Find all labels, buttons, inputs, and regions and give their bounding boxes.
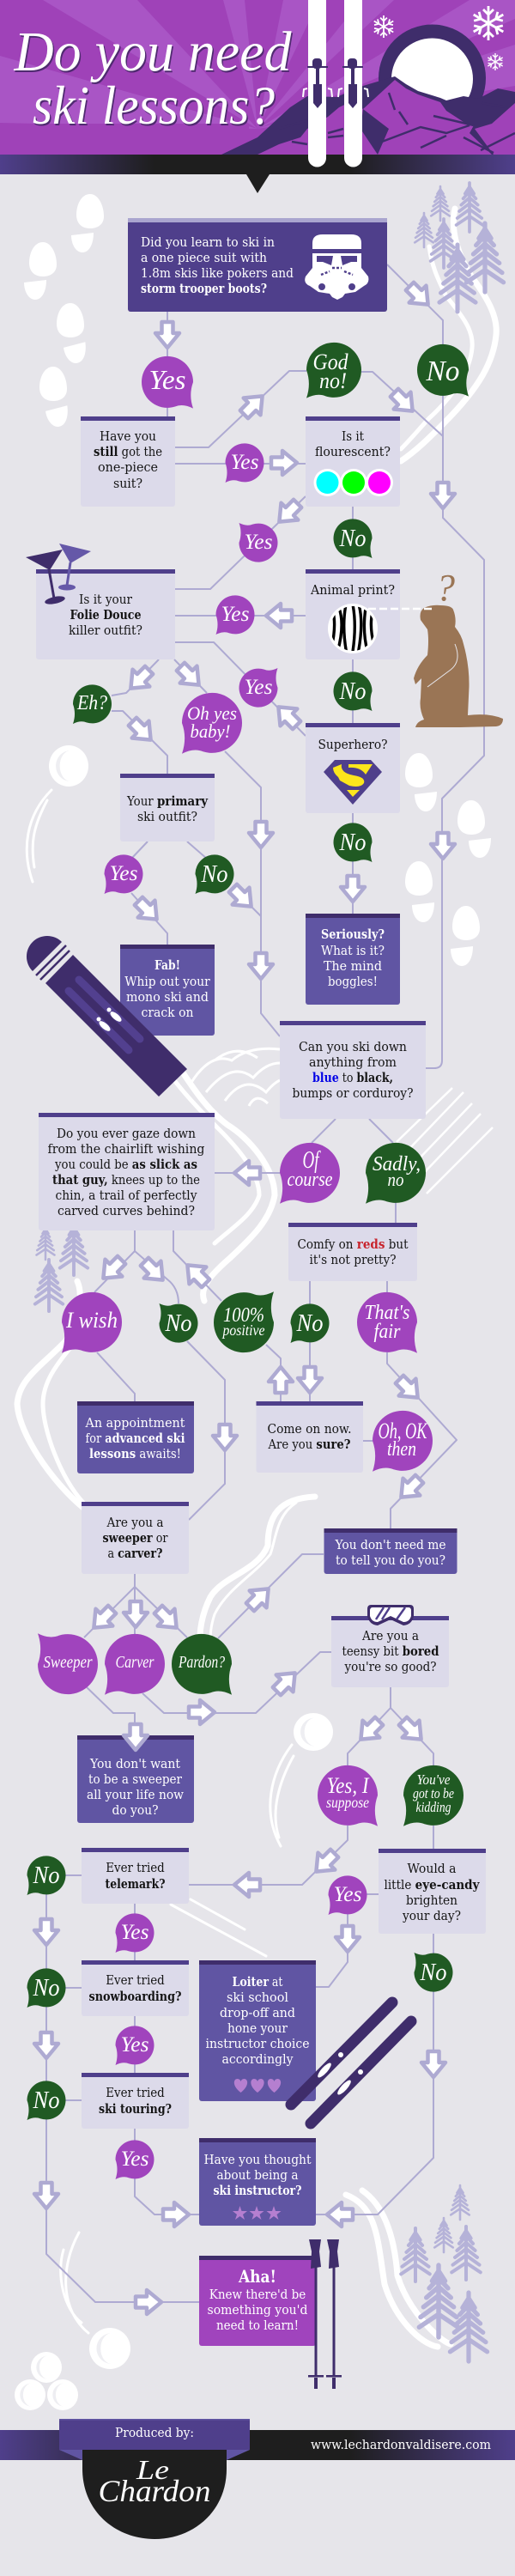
panel: you don't need me: You don't need me [335,1539,446,1552]
bubble: Sadly, no [366,1143,426,1204]
snowballs [15,745,333,2410]
panel: you don't want to be a sweeper: all your life now [87,1789,185,1802]
panel: slick as that guy: chin, a trail of perfectly [55,1189,197,1203]
panel: seriously: The mind [324,960,382,974]
panel: blue to black: Can you ski down [299,1041,407,1054]
trees [35,183,504,2361]
panel: storm trooper boots [128,218,387,312]
icon: storm trooper helmet [305,234,368,300]
bubble: Of course: course [287,1169,333,1191]
bubble: Of course: Of [302,1147,321,1174]
bubble: Yes: Yes [244,531,273,554]
bubble: No: No [420,1959,446,1986]
illustration: mono ski [27,936,187,1097]
produced by ribbon: Produced by: [115,2427,194,2440]
bubble: No: No [296,1310,323,1337]
bubble: That's fair: fair [374,1321,401,1343]
panel: primary outfit: ski outfit? [137,811,197,824]
panel: ski touring [82,2073,189,2129]
bubble: Yes, I suppose: suppose [326,1794,369,1811]
panel: you don't want to be a sweeper [77,1735,194,1823]
bubble: I wish: I wish [65,1308,118,1333]
bubble: No: No [339,829,366,856]
panel: folie douce: Is it your [79,593,132,607]
bubble: Yes: Yes [221,603,249,626]
produced by ribbon [59,2419,250,2450]
panel: slick as that guy: that guy, knees up to the [52,1173,200,1188]
panel: teensy bit bored: teensy bit bored [342,1644,439,1659]
panel: storm trooper boots: a one piece suit with [141,252,267,265]
panel: folie douce: Folie Douce [70,608,141,623]
bubble: Oh yes baby!: baby! [191,720,230,742]
title: ski lessons? [34,76,276,137]
bar [0,155,515,174]
connector lines [46,264,484,2302]
panel: still got the suit: suit? [113,477,142,491]
panel: seriously [306,914,400,1005]
panel: primary outfit: Your primary [126,794,209,809]
bubble: Sweeper [38,1633,98,1694]
bubble: You've got to be kidding: You've [417,1771,451,1788]
panel: blue to black [280,1021,426,1119]
icon: super shield [324,760,382,805]
panel: snowboarding: Ever tried [106,1974,165,1988]
panel: still got the suit: still got the [94,445,162,459]
icon: stars [233,2206,282,2220]
panel: loiter: Loiter at [232,1975,283,1990]
logo badge [59,2450,250,2539]
snowflakes [373,6,506,70]
bubble: Oh yes baby! [182,693,242,754]
panel: flourescent: Is it [342,430,364,444]
bubble: 100% positive: 100% [223,1304,264,1327]
panel: sweeper or carver: a carver? [108,1546,163,1561]
bubble: Oh, OK then: Oh, OK [378,1419,428,1443]
icon: zebra print [328,604,378,657]
panel: aha: something you'd [208,2304,307,2318]
bubble: Yes [328,1875,367,1915]
panel: fab: Fab! [154,958,180,973]
panel: eye candy [379,1849,486,1934]
bubble: Yes [142,356,193,409]
illustration: crossed skis [291,2002,411,2123]
panel: loiter: instructor choice [206,2038,309,2051]
bubble: Yes: Yes [244,676,273,699]
panel: telemark: telemark? [105,1877,165,1892]
panel: aha: need to learn! [216,2319,299,2333]
bubble: No [334,519,373,558]
panel: loiter: hone your [227,2022,288,2036]
bubble: No [414,1953,452,1992]
bubble: No [27,1968,65,2008]
panel: eye candy: your day? [402,1910,461,1923]
panel: slick as that guy [39,1113,215,1230]
panel: ski instructor [199,2138,316,2226]
panel: superhero [306,723,400,813]
bubble: Eh? [73,684,112,724]
icon: goggles [367,1605,414,1625]
title: Do you need [14,21,292,83]
panel: come on now [256,1401,363,1473]
bubble: That's fair: That's [364,1302,410,1324]
panel: slick as that guy: carved curves behind? [58,1205,195,1218]
ski tracks [17,209,496,2347]
panel: ski touring: ski touring? [99,2102,172,2117]
panel: fab: crack on [141,1006,194,1020]
panel: comfy on reds [288,1223,417,1281]
bubble: Oh, OK then: then [387,1438,416,1461]
bubble: Eh?: Eh? [76,692,107,714]
panel: come on now: Are you sure? [268,1437,350,1452]
bubble: Of course [280,1143,340,1204]
panel: you don't need me [324,1528,457,1574]
bubble: Sadly, no: no [388,1169,403,1190]
panel: advanced ski lessons: for advanced ski [86,1431,185,1446]
panel: blue to black: anything from [309,1056,397,1070]
panel: fab: Whip out your [124,975,210,989]
bubble: Yes: Yes [149,364,185,395]
bubble: Yes [239,668,278,708]
panel: fab: mono ski and [126,991,209,1005]
panel: advanced ski lessons: An appointment [85,1417,185,1431]
icon: glasses line [368,608,433,610]
panel: aha [199,2256,316,2346]
panel: teensy bit bored: you're so good? [344,1661,437,1674]
panel: advanced ski lessons: lessons awaits! [89,1447,181,1461]
bubble: Yes: Yes [333,1883,362,1906]
panel: sweeper or carver [82,1502,189,1574]
panel: teensy bit bored: Are you a [361,1630,419,1643]
panel: animal print: Animal print? [310,584,395,598]
bubble: No [27,1856,65,1895]
panel: animal print [306,569,400,659]
footer url: www.lechardonvaldisere.com [311,2439,491,2452]
bubble: Carver: Carver [115,1653,154,1672]
title [14,21,294,137]
panel: loiter [199,1960,316,2101]
bubble: God no!: no! [319,368,347,393]
bubble: No: No [339,526,366,552]
panel: still got the suit: one-piece [98,461,158,475]
bubble: Pardon? [172,1634,232,1695]
panel: you don't want to be a sweeper: do you? [112,1804,159,1818]
bubble: Yes: Yes [120,1921,149,1944]
bubble: No: No [339,678,366,705]
icon: cocktail glasses [26,544,91,605]
panel: storm trooper boots: Did you learn to ski in [141,236,275,250]
panel: you don't need me: to tell you do you? [336,1554,445,1568]
bubble: No [195,854,233,894]
title: Do you need [15,22,294,85]
bubble: Yes [225,443,264,483]
panel: eye candy: brighten [406,1894,457,1908]
panel: still got the suit [81,416,175,507]
bubble: 100% positive [214,1291,274,1352]
panel: ski instructor: Have you thought [204,2154,312,2167]
bubble: You've got to be kidding [403,1765,464,1826]
bubble: Yes [115,2026,154,2065]
bubble: Yes: Yes [120,2148,149,2171]
panel: aha: Aha! [238,2266,276,2287]
panel: teensy bit bored [331,1616,449,1687]
bubble: Yes: Yes [230,451,259,474]
footer [0,2419,515,2539]
panel: loiter: ski school [227,1991,288,2005]
panel: snowboarding: snowboarding? [89,1990,182,2004]
bubble: Yes: Yes [120,2033,149,2057]
answer bubbles [27,343,469,2179]
panel: blue to black: bumps or corduroy? [292,1087,414,1101]
panel: advanced ski lessons [77,1401,194,1473]
panel: sweeper or carver: sweeper or [103,1531,168,1546]
panel: slick as that guy: you could be as slick as [54,1157,197,1172]
bubble: Oh, OK then [373,1411,433,1472]
panel: eye candy: little eye-candy [385,1878,480,1893]
panel: slick as that guy: Do you ever gaze down [57,1127,196,1141]
bubble: God no!: God [312,349,348,374]
illustration: ski poles [308,2239,342,2389]
panel: seriously: Seriously? [321,927,385,942]
bubble: Yes [115,2140,154,2179]
bubble: No [334,671,373,711]
bubble: No: No [165,1310,192,1337]
panel: primary outfit [120,774,215,841]
bubble: That's fair [357,1292,417,1353]
panel: ski instructor: ski instructor? [213,2184,302,2198]
bubble: No [334,823,373,862]
skis [303,0,368,167]
icon: question mark: ? [436,567,455,609]
icon: colour dots [314,469,393,496]
bubble: 100% positive: positive [221,1321,264,1339]
bubble: Yes, I suppose: Yes, I [326,1773,370,1798]
bubble: Yes [115,1913,154,1953]
bubble: No: No [33,1862,60,1889]
logo badge: Chardon [98,2474,211,2508]
panel: folie douce [36,569,175,659]
illustration: marmot [368,567,503,727]
bubble: Yes, I suppose [318,1765,378,1826]
title: ski lessons? [33,75,275,136]
bubble: Sadly, no: Sadly, [373,1153,421,1176]
panel: telemark [82,1848,189,1904]
panel: aha: Knew there'd be [209,2288,306,2302]
pointer [246,174,270,193]
panel: still got the suit: Have you [100,430,156,444]
bubble: Yes: Yes [110,862,137,885]
bubble: You've got to be kidding: kidding [415,1799,451,1815]
bubble: Sweeper: Sweeper [43,1653,93,1672]
panel: superhero: Superhero? [318,738,388,752]
bubble: No: No [426,355,460,387]
bubble: Carver [105,1634,165,1695]
bubble: God no! [306,343,361,398]
bubble: No [417,344,469,397]
bubble: Pardon?: Pardon? [178,1653,225,1672]
panel: storm trooper boots: storm trooper boots? [141,282,267,296]
panel: you don't want to be a sweeper: You don't want [89,1758,180,1771]
panel: flourescent: flourescent? [315,446,391,459]
footprints [24,194,491,966]
panel: comfy on reds: Comfy on reds but [297,1237,409,1252]
bubble: No: No [33,1975,60,2002]
panel: seriously: What is it? [321,945,385,958]
panel: ski instructor: about being a [216,2169,299,2183]
moon [379,24,486,132]
panel: come on now: Come on now. [268,1423,352,1437]
bubble: No: No [33,2087,60,2114]
bubble: No [159,1303,197,1343]
bubble: Yes [104,854,142,894]
panel: flourescent [306,416,400,507]
bubble: You've got to be kidding: got to be [413,1785,454,1801]
bubble: No [290,1303,329,1343]
panel: slick as that guy: from the chairlift wishing [48,1143,204,1157]
panel: fab [120,945,215,1036]
panel: snowboarding [82,1960,189,2016]
panel: sweeper or carver: Are you a [106,1516,164,1530]
panel: folie douce: killer outfit? [69,624,142,638]
bubble: I wish [62,1292,122,1353]
panel: you don't want to be a sweeper: to be a sweeper [88,1773,182,1787]
panel: seriously: boggles! [328,975,378,989]
panel: loiter: accordingly [221,2053,294,2067]
panel: blue to black: blue to black, [312,1071,393,1085]
panel: comfy on reds: it's not pretty? [309,1254,397,1267]
panel: loiter: drop-off and [220,2007,295,2020]
arrows [34,277,455,2314]
bubble: No [27,2081,65,2120]
bubble: Yes [239,523,277,562]
mountains [221,76,515,155]
header banner [0,0,515,193]
panel: eye candy: Would a [407,1862,457,1876]
bubble: Oh yes baby!: Oh yes [187,702,237,724]
bubble: Yes [215,595,254,635]
icon: hearts [234,2079,281,2093]
panel: storm trooper boots: 1.8m skis like pokers and [141,267,294,281]
panel: telemark: Ever tried [106,1862,165,1875]
bubble: No: No [201,861,228,888]
logo badge: Le [136,2454,169,2485]
panel: ski touring: Ever tried [106,2087,165,2100]
